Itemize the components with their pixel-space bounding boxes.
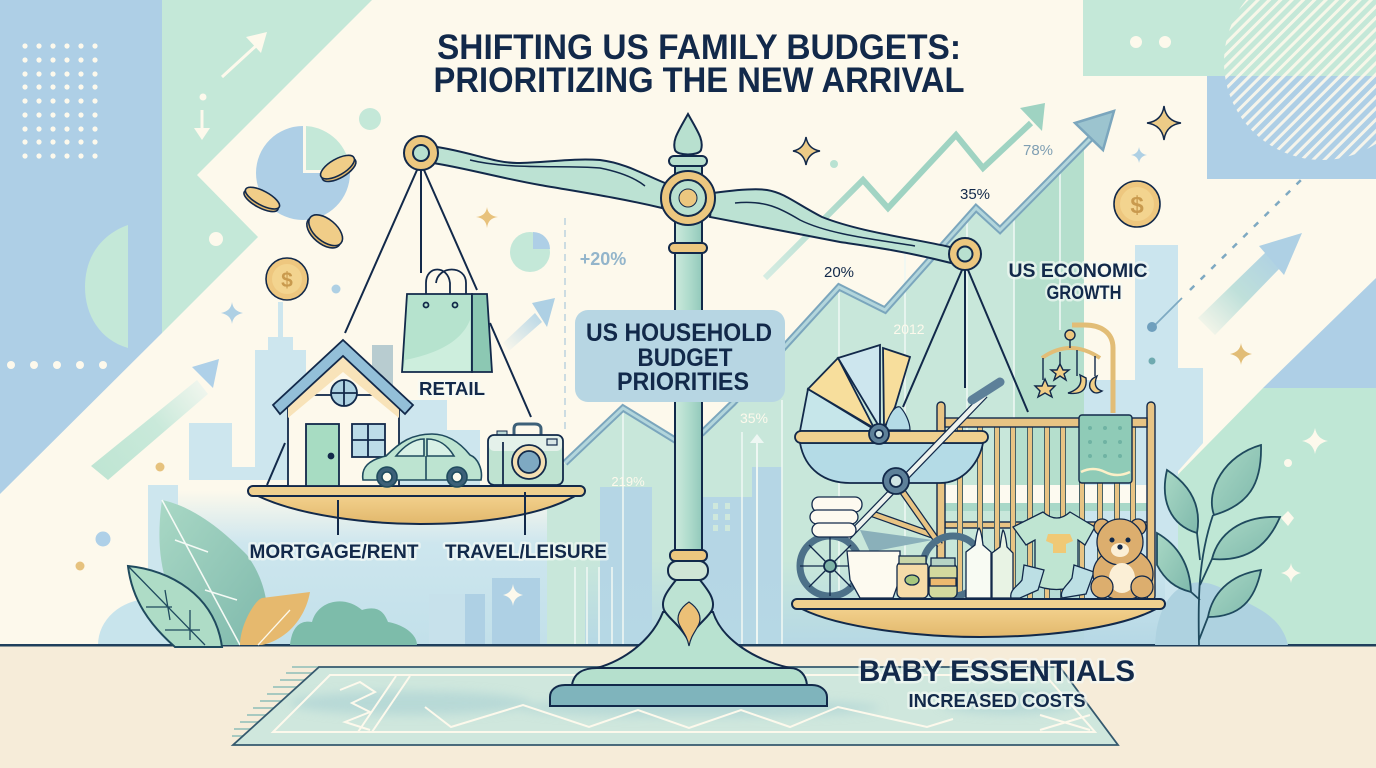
label: mortgage/rent: MORTGAGE/RENT [250,542,419,563]
baby bottles [966,528,1013,598]
label: baby essentials: BABY ESSENTIALS [859,655,1135,688]
small arrows on mint panel [194,32,267,140]
chart values [580,142,1053,489]
label: us economic growth: GROWTH [1046,283,1122,304]
chart values: 35% [740,410,768,426]
left pan [248,486,585,535]
baby items [810,497,1153,600]
title [434,28,964,100]
chart values: 20% [824,264,854,281]
onesie [1013,512,1095,590]
floor [0,644,1376,768]
baby mobile [1035,330,1102,397]
chart values: 2012 [893,321,925,337]
decorative shapes and dots, left [7,36,1171,570]
scale base [597,612,790,668]
diaper [847,551,900,598]
arrow, left background [91,359,219,480]
icon: house [273,340,413,486]
coins, left: $ [281,269,293,292]
coins, left [241,151,359,300]
title: PRIORITIZING THE NEW ARRIVAL [434,61,964,100]
label: retail: RETAIL [419,379,485,399]
chart values: 219% [611,474,645,489]
scale beam [404,136,981,270]
finial [674,114,702,154]
chart values: +20% [580,249,626,269]
stacked diapers [810,497,862,537]
arrow and dashed axis near +20% [503,218,565,432]
rug [232,667,1118,745]
growth arrow lines [565,103,1114,463]
small pie icon [510,232,550,272]
growth chart area [547,150,1203,645]
icon: car [363,434,481,487]
central label box: PRIORITIES [617,368,749,396]
chart values: 35% [960,186,990,203]
coin, right: $ [1130,192,1144,219]
pole [675,160,702,552]
pie chart, left [256,126,350,220]
crib [937,325,1155,600]
label: baby essentials: INCREASED COSTS [908,691,1086,711]
scale strings [267,170,1028,485]
city skyline, left [98,302,580,691]
title: SHIFTING US FAMILY BUDGETS: [437,28,961,67]
stroller [795,345,1000,596]
icon: camera [488,424,563,485]
dashed trend and arrow, right [1147,180,1302,364]
teddy bear [1091,519,1153,600]
baby food jars [897,556,957,598]
socks [1011,565,1044,598]
label: us economic growth [1008,261,1148,304]
plant, bottom left [128,500,417,647]
central label box: BUDGET [638,344,732,372]
sparkle icons [221,106,1328,632]
chart values: 78% [1023,142,1053,159]
central label box [575,310,785,402]
central label box: US HOUSEHOLD [586,319,772,347]
label: baby essentials [859,655,1135,711]
coin, right [1114,181,1160,227]
right pan [792,599,1165,637]
plant, right [1155,445,1288,645]
label: travel/leisure: TRAVEL/LEISURE [445,542,607,563]
icon: shopping bag [402,270,492,372]
scale stand [550,114,827,706]
label: us economic growth: US ECONOMIC [1008,261,1148,282]
